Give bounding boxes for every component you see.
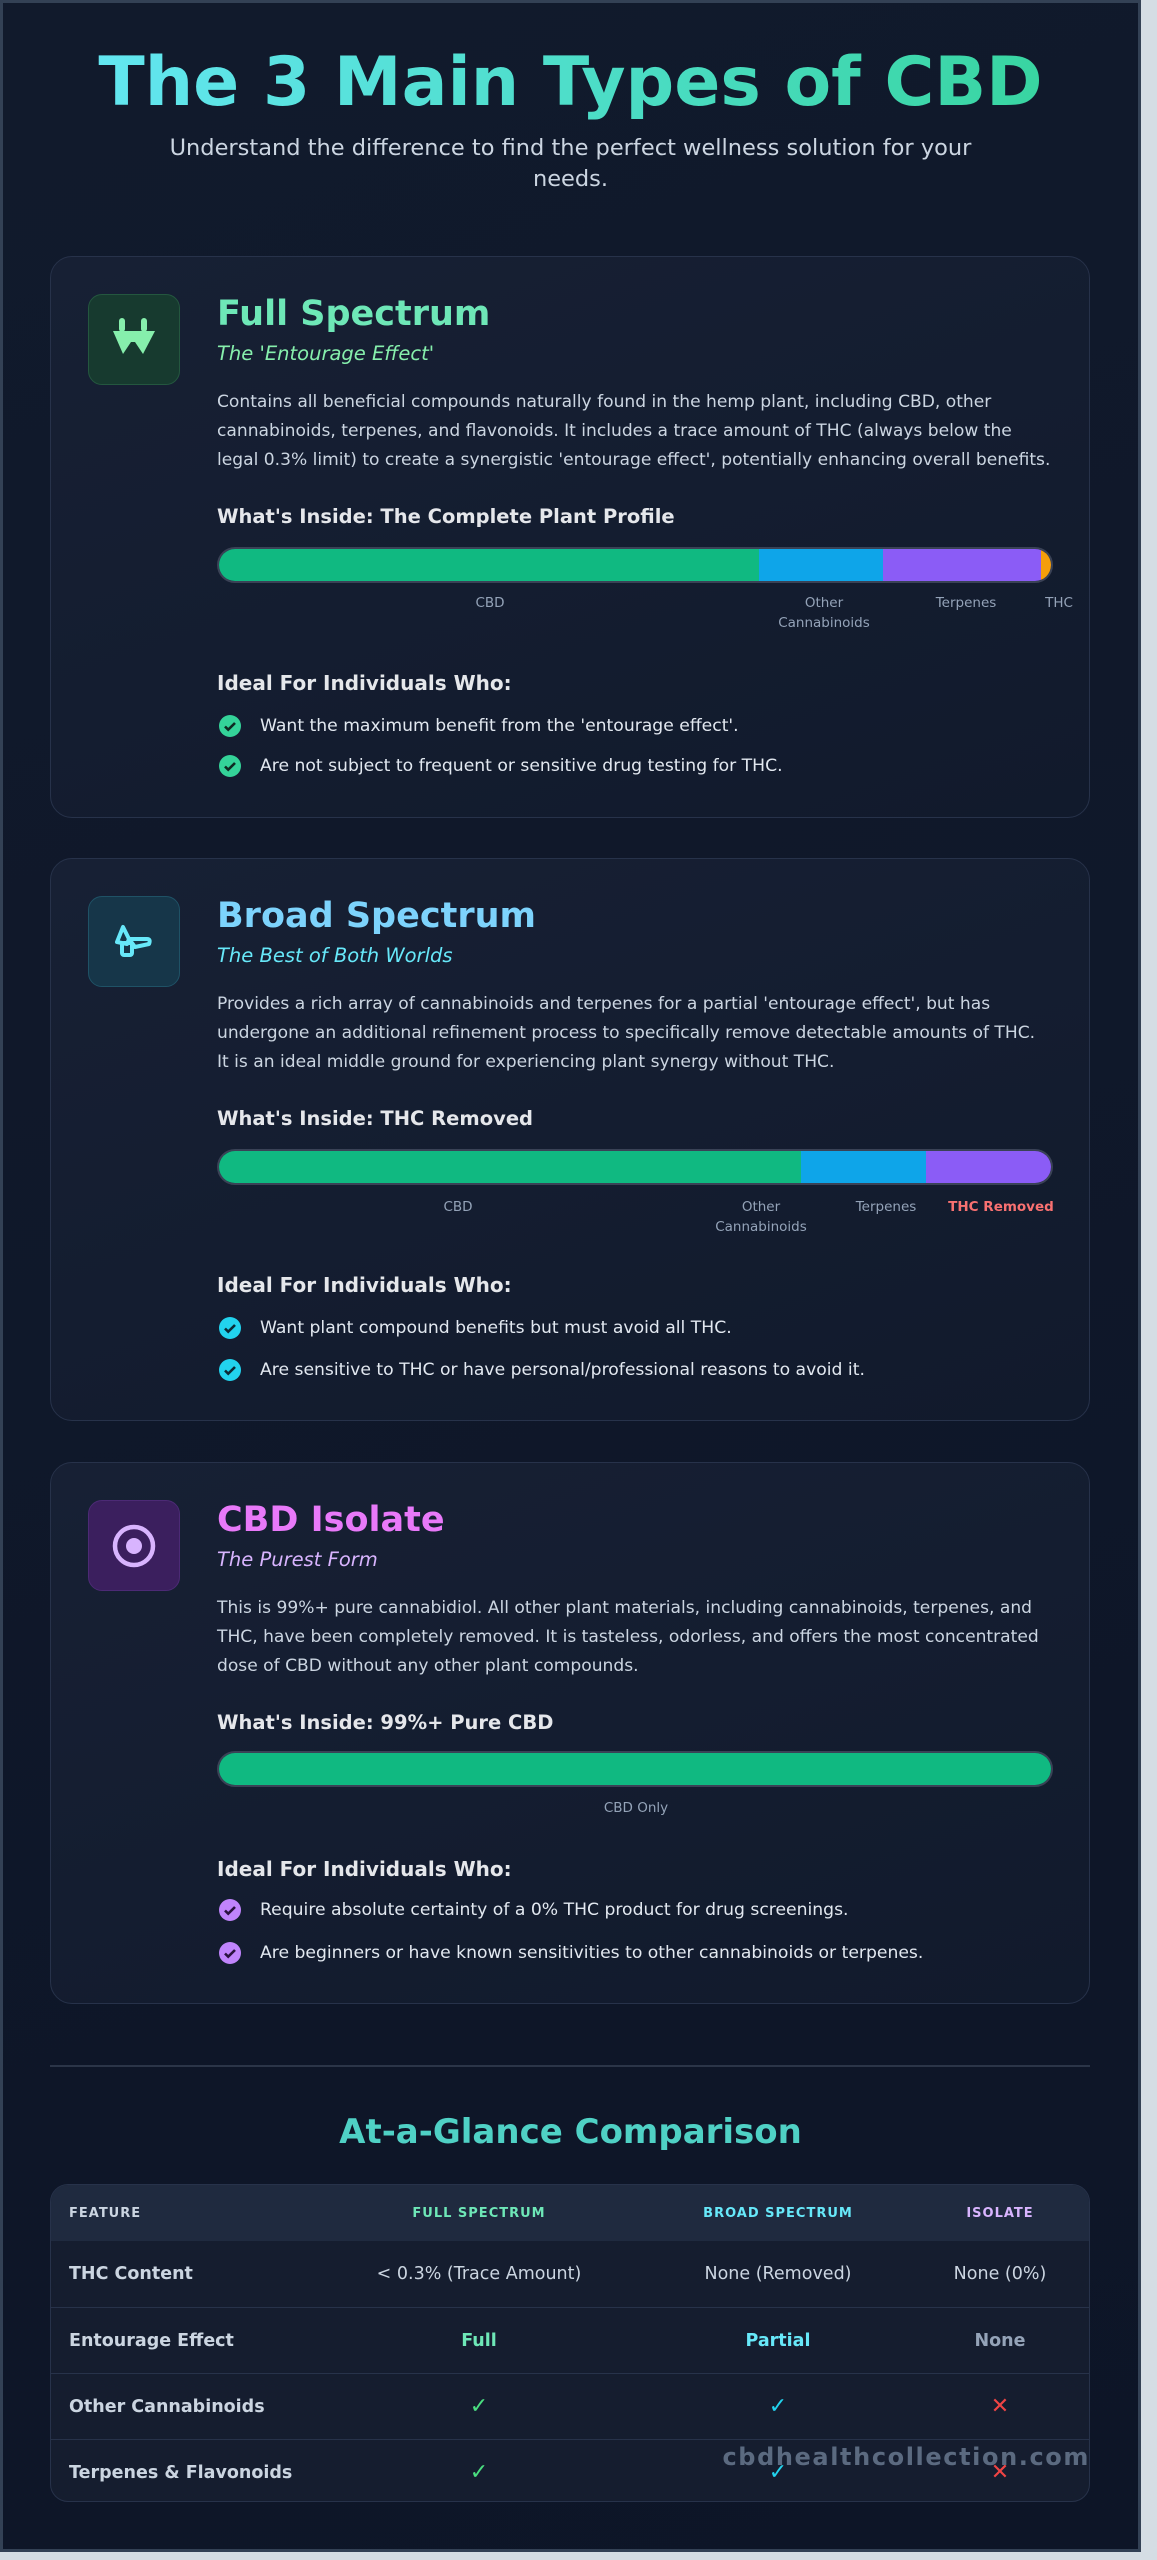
bar labels xyxy=(475,595,1073,631)
bar labels xyxy=(443,1199,1054,1235)
bullet 2: Are sensitive to THC or have personal/professional reasons to avoid it. xyxy=(260,1360,865,1380)
bar labels: THC xyxy=(1045,595,1073,611)
subtitle: needs. xyxy=(533,166,608,192)
bar labels: Terpenes xyxy=(936,595,996,611)
heading: ideal for: Ideal For Individuals Who: xyxy=(217,1857,512,1881)
panel: broad spectrum xyxy=(50,858,1090,1421)
heading: ideal for: Ideal For Individuals Who: xyxy=(217,1273,512,1297)
card subtitle: The 'Entourage Effect' xyxy=(217,342,434,365)
description: Provides a rich array of cannabinoids and terpenes for a partial 'entourage effect', but has xyxy=(217,994,990,1014)
bar chart xyxy=(217,1149,1053,1185)
subtitle xyxy=(170,135,972,192)
row: THC: THC Content xyxy=(69,2264,193,2284)
bar labels: Cannabinoids xyxy=(778,615,870,631)
card title: CBD Isolate xyxy=(217,1500,445,1540)
comparison table xyxy=(50,2184,1090,2502)
row: entourage: Partial xyxy=(746,2330,810,2350)
header row: FULL SPECTRUM xyxy=(412,2206,546,2220)
description: It is an ideal middle ground for experiencing plant synergy without THC. xyxy=(217,1052,834,1072)
card subtitle: The Purest Form xyxy=(217,1548,378,1571)
row: terpenes: ✕ xyxy=(991,2460,1009,2485)
header row: ISOLATE xyxy=(966,2206,1034,2220)
bar labels: Cannabinoids xyxy=(715,1219,807,1235)
heading: what's inside: What's Inside: The Complete Plant Profile xyxy=(217,505,675,528)
bar chart xyxy=(217,547,1053,583)
row: THC xyxy=(69,2264,1046,2284)
subtitle: Understand the difference to find the perfect wellness solution for your xyxy=(170,135,971,161)
bar labels: Terpenes xyxy=(856,1199,916,1215)
row: THC: None (Removed) xyxy=(704,2264,852,2284)
panel: isolate xyxy=(50,1462,1090,2004)
icon: target xyxy=(88,1500,180,1591)
panel: full spectrum xyxy=(50,256,1090,818)
heading: ideal for: Ideal For Individuals Who: xyxy=(217,671,512,695)
bar labels: Other xyxy=(805,595,843,611)
row: terpenes: Terpenes & Flavonoids xyxy=(69,2462,292,2482)
bar labels: CBD xyxy=(475,595,505,611)
description: undergone an additional refinement process to specifically remove detectable amounts of THC. xyxy=(217,1023,1035,1043)
heading: comparison: At-a-Glance Comparison xyxy=(339,2112,802,2152)
row: terpenes: ✓ xyxy=(470,2460,488,2485)
row: cannabinoids: ✕ xyxy=(991,2394,1009,2419)
bar labels: CBD xyxy=(443,1199,473,1215)
row: terpenes: ✓ xyxy=(769,2460,787,2485)
title: The 3 Main Types of CBD xyxy=(98,43,1043,122)
row: THC: None (0%) xyxy=(954,2264,1046,2284)
row: entourage: Entourage Effect xyxy=(69,2330,234,2350)
icon: plug xyxy=(88,294,180,385)
description: dose of CBD without any other plant compounds. xyxy=(217,1656,639,1676)
bar labels: THC Removed xyxy=(948,1199,1054,1215)
bullet 1: Want the maximum benefit from the 'entourage effect'. xyxy=(260,716,739,736)
icon: molecule xyxy=(88,896,180,987)
row: entourage: None xyxy=(974,2330,1026,2350)
card title: Full Spectrum xyxy=(217,294,490,334)
bar labels: Other xyxy=(742,1199,780,1215)
bullet 2: Are not subject to frequent or sensitive drug testing for THC. xyxy=(260,756,783,776)
description: cannabinoids, terpenes, and flavonoids. It includes a trace amount of THC (always below the xyxy=(217,421,1012,441)
header row: FEATURE xyxy=(69,2206,141,2220)
description: Contains all beneficial compounds naturally found in the hemp plant, including CBD, other xyxy=(217,392,991,412)
heading: what's inside: What's Inside: 99%+ Pure CBD xyxy=(217,1711,553,1734)
row: entourage xyxy=(51,2307,1089,2373)
card subtitle: The Best of Both Worlds xyxy=(217,944,453,967)
bullet 2: Are beginners or have known sensitivities to other cannabinoids or terpenes. xyxy=(260,1943,923,1963)
row: cannabinoids: ✓ xyxy=(470,2394,488,2419)
row: cannabinoids: ✓ xyxy=(769,2394,787,2419)
bullet 1: Require absolute certainty of a 0% THC product for drug screenings. xyxy=(260,1900,848,1920)
bar label: CBD Only xyxy=(604,1800,668,1816)
description: THC, have been completely removed. It is tasteless, odorless, and offers the most concentrated xyxy=(217,1627,1039,1647)
card title: Broad Spectrum xyxy=(217,896,536,936)
row: cannabinoids xyxy=(51,2373,1089,2439)
description xyxy=(217,994,1035,1072)
watermark: cbdhealthcollection.com xyxy=(722,2443,1090,2471)
header row: BROAD SPECTRUM xyxy=(703,2206,853,2220)
description xyxy=(216,1598,1039,1676)
heading: what's inside: What's Inside: THC Removed xyxy=(217,1107,533,1130)
bar chart xyxy=(217,1751,1053,1787)
description: This is 99%+ pure cannabidiol. All other plant materials, including cannabinoids, terpenes, and xyxy=(217,1598,1032,1618)
description: legal 0.3% limit) to create a synergistic 'entourage effect', potentially enhancing overall benefits. xyxy=(217,450,1050,470)
row: THC: < 0.3% (Trace Amount) xyxy=(377,2264,581,2284)
row: entourage: Full xyxy=(461,2330,497,2350)
description xyxy=(217,392,1050,470)
row: terpenes xyxy=(51,2439,1089,2505)
bullet 1: Want plant compound benefits but must avoid all THC. xyxy=(260,1318,732,1338)
header row xyxy=(51,2185,1089,2241)
row: cannabinoids: Other Cannabinoids xyxy=(69,2396,265,2416)
